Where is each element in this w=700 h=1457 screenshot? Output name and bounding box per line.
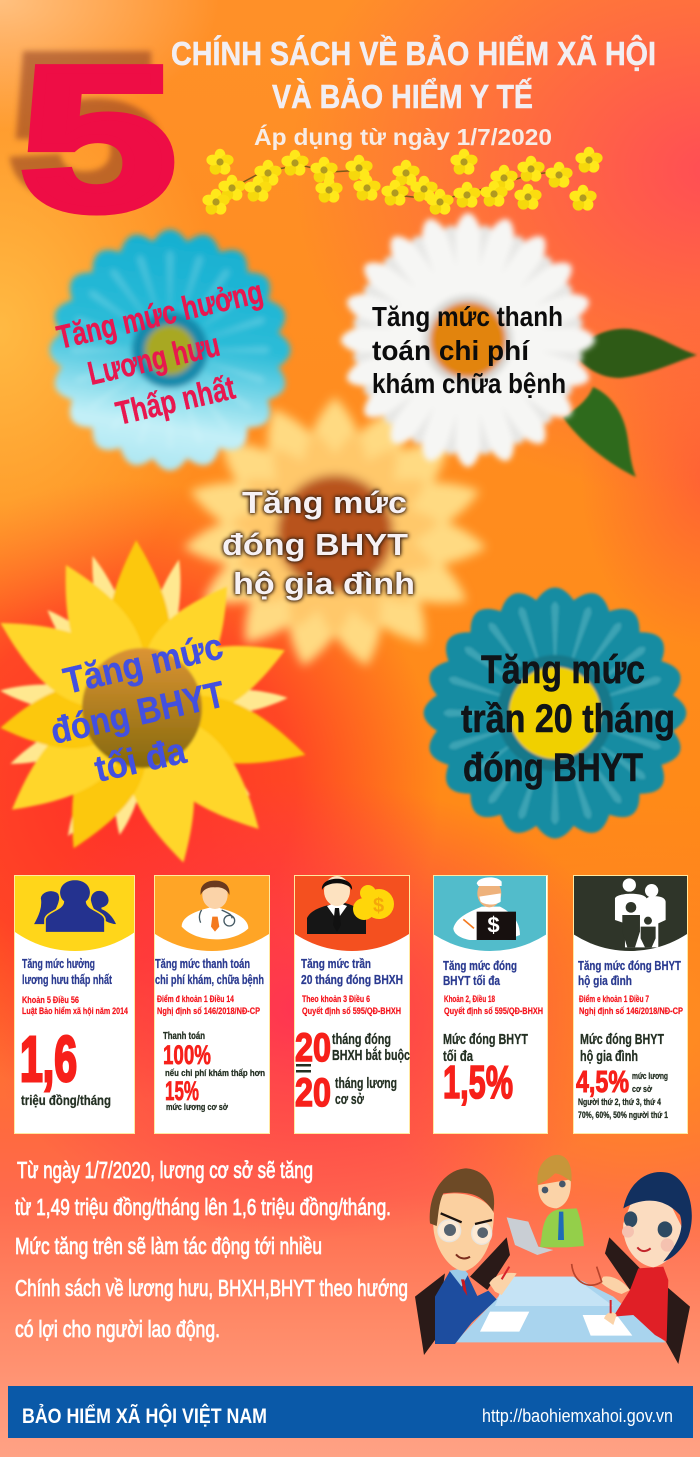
legal reference: Khoản 2, Điều 18 — [444, 994, 495, 1005]
icon: doctor — [155, 876, 269, 951]
flower label: maximum BHYT: Tăng mức — [60, 625, 227, 702]
payment figures — [163, 1031, 265, 1113]
explanatory paragraph — [15, 1157, 408, 1342]
yellow apricot blossom garland — [202, 147, 603, 215]
20 equals 20: tháng lương — [335, 1075, 397, 1092]
flower label: maximum BHYT — [47, 625, 229, 790]
title: VÀ BẢO HIỂM Y TẾ — [272, 78, 533, 115]
legal reference — [22, 995, 129, 1017]
subtitle date: Áp dụng từ ngày 1/7/2020 — [254, 123, 552, 150]
flower label: maximum BHYT: tối đa — [91, 730, 190, 790]
man with laptop — [507, 1155, 584, 1255]
legal reference — [579, 994, 684, 1017]
unit text: triệu đồng/tháng — [21, 1092, 111, 1108]
figure 1,6: 1,6 — [20, 1023, 77, 1095]
20 equals 20 — [295, 1026, 410, 1115]
icon: family — [574, 876, 687, 951]
card title: BHYT tối đa — [443, 973, 501, 988]
man with glasses — [415, 1168, 517, 1355]
flower label: household BHYT — [222, 485, 415, 601]
maximum rate: tối đa — [443, 1048, 473, 1065]
card 2: medical payment — [154, 875, 270, 1134]
payment figures: 15% — [165, 1076, 199, 1106]
card title: Tăng mức thanh toán — [155, 956, 250, 971]
card title: Tăng mức hưởng — [22, 956, 95, 971]
card title — [155, 956, 264, 987]
flower: pale yellow — [181, 397, 489, 671]
household rate: 4,5% — [576, 1064, 629, 1099]
household rate — [576, 1031, 668, 1120]
flower label: pension: Thấp nhất — [112, 369, 238, 432]
card 1: pension — [14, 875, 135, 1134]
card title: lương hưu thấp nhất — [22, 972, 112, 987]
card title: hộ gia đình — [578, 973, 632, 988]
20 equals 20: cơ sở — [335, 1091, 364, 1108]
maximum rate — [443, 1031, 528, 1108]
flower label: pension: Lương hưu — [84, 326, 223, 392]
20 equals 20: BHXH bắt buộc — [332, 1046, 410, 1064]
20 equals 20: tháng đóng — [332, 1031, 391, 1048]
icon: businessman and coins — [295, 876, 409, 951]
legal reference: Nghị định số 146/2018/NĐ-CP — [157, 1006, 261, 1017]
table — [455, 1277, 666, 1342]
payment figures: Thanh toán — [163, 1031, 205, 1042]
household rate: Người thứ 2, thứ 3, thứ 4 — [578, 1097, 661, 1107]
card 3: 20 month ceiling — [294, 875, 410, 1134]
flower: blue — [45, 225, 295, 475]
legal reference: Luật Bảo hiểm xã hội năm 2014 — [22, 1006, 129, 1017]
flower label: 20 months ceiling: đóng BHYT — [463, 746, 643, 790]
card title: Tăng mức trần — [301, 956, 371, 971]
flower label: pension — [53, 273, 266, 432]
leaves of white flower — [563, 329, 697, 477]
flower label: maximum BHYT: đóng BHYT — [47, 673, 229, 752]
icon: masked nurse with dollar board: $ — [487, 913, 500, 938]
card title — [443, 958, 517, 988]
card title — [578, 958, 681, 988]
household rate: Mức đóng BHYT — [580, 1031, 664, 1048]
flower: teal — [424, 588, 686, 838]
card title: Tăng mức đóng — [443, 958, 517, 973]
payment figures: 100% — [163, 1040, 211, 1070]
flower: white — [335, 207, 601, 473]
legal reference: Khoản 5 Điều 56 — [22, 995, 79, 1006]
flower: golden yellow — [0, 539, 314, 871]
household rate: 70%, 60%, 50% người thứ 1 — [578, 1110, 668, 1120]
explanatory paragraph: Mức tăng trên sẽ làm tác động tới nhiều — [15, 1233, 322, 1259]
card title — [301, 956, 403, 987]
20 equals 20: 20 — [295, 1026, 331, 1070]
big number 5: 5 — [8, 12, 164, 240]
legal reference: Điểm đ khoản 1 Điều 14 — [157, 994, 235, 1005]
explanatory paragraph: Từ ngày 1/7/2020, lương cơ sở sẽ tăng — [17, 1157, 313, 1183]
flower label: household BHYT: Tăng mức — [242, 485, 407, 520]
card title: 20 tháng đóng BHXH — [301, 972, 403, 987]
maximum rate: Mức đóng BHYT — [443, 1031, 528, 1048]
footer bar — [8, 1386, 693, 1438]
organisation name: BẢO HIỂM XÃ HỘI VIỆT NAM — [22, 1404, 267, 1428]
payment figures: nếu chi phí khám thấp hơn — [165, 1068, 265, 1079]
illustration: three people at a meeting table — [415, 1155, 692, 1364]
flower label: medical costs: khám chữa bệnh — [372, 368, 566, 399]
flower label: household BHYT: đóng BHYT — [222, 527, 408, 562]
legal reference: Quyết định số 595/QĐ-BHXH — [444, 1006, 543, 1017]
flower label: medical costs: Tăng mức thanh — [372, 301, 563, 332]
flower label: 20 months ceiling — [461, 648, 675, 790]
icon: businessman and coins: $ — [373, 895, 384, 917]
icon: group of people — [15, 876, 134, 951]
payment figures: mức lương cơ sở — [166, 1102, 228, 1113]
explanatory paragraph: Chính sách về lương hưu, BHXH,BHYT theo hướng — [15, 1275, 408, 1301]
explanatory paragraph: có lợi cho người lao động. — [15, 1316, 220, 1342]
legal reference — [157, 994, 261, 1017]
woman in red — [572, 1172, 692, 1364]
icon: masked nurse with dollar board — [434, 876, 546, 951]
website url: http://baohiemxahoi.gov.vn — [482, 1406, 673, 1426]
card title: chi phí khám, chữa bệnh — [155, 972, 264, 987]
big number 5 — [8, 12, 176, 253]
legal reference — [444, 994, 543, 1017]
flower label: medical costs — [372, 301, 566, 399]
flower label: medical costs: toán chi phí — [372, 335, 530, 366]
big number 5: 5 — [20, 25, 176, 253]
card 4: maximum BHYT — [433, 875, 548, 1134]
household rate: cơ sở — [632, 1084, 652, 1094]
flower label: pension: Tăng mức hưởng — [53, 273, 266, 356]
card title — [22, 956, 112, 987]
household rate: hộ gia đình — [580, 1048, 638, 1065]
household rate: mức lương — [632, 1071, 668, 1081]
title — [171, 34, 656, 115]
20 equals 20: 20 — [295, 1071, 331, 1115]
legal reference: Theo khoản 3 Điều 6 — [302, 994, 370, 1005]
explanatory paragraph: từ 1,49 triệu đồng/tháng lên 1,6 triệu đồng/tháng. — [15, 1194, 391, 1220]
flower label: 20 months ceiling: Tăng mức — [481, 648, 645, 692]
maximum rate: 1,5% — [443, 1056, 513, 1108]
card 5: household BHYT — [573, 875, 688, 1134]
legal reference — [302, 994, 401, 1017]
flower label: household BHYT: hộ gia đình — [233, 566, 415, 601]
legal reference: Điểm e khoản 1 Điều 7 — [579, 994, 649, 1005]
legal reference: Quyết định số 595/QĐ-BHXH — [302, 1006, 401, 1017]
